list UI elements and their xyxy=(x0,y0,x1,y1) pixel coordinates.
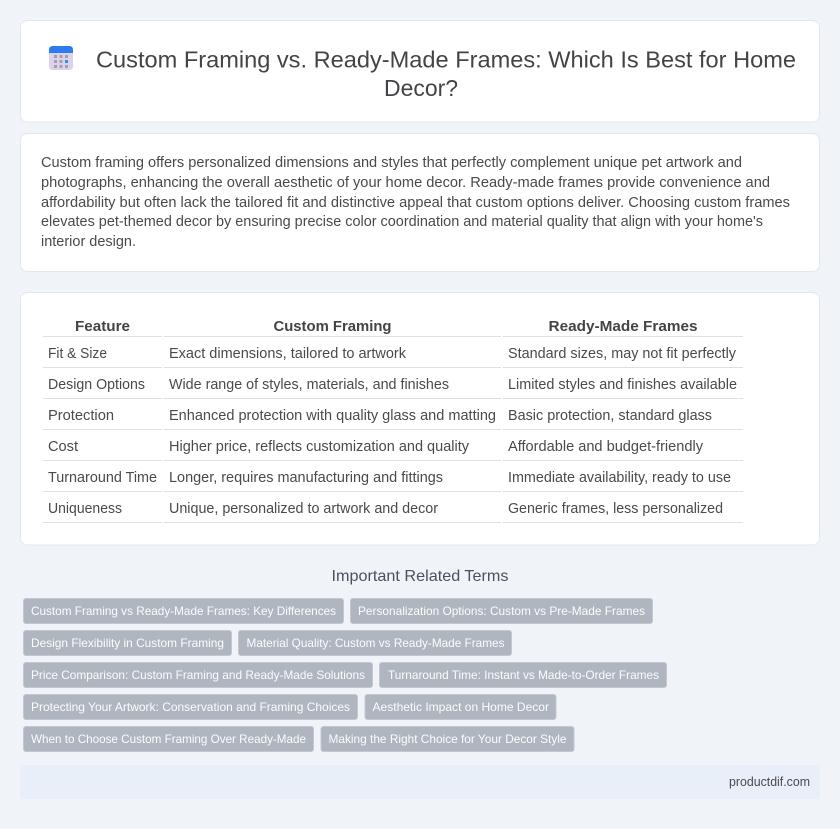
tag xyxy=(24,598,344,624)
row: protection: Basic protection, standard glass xyxy=(508,408,712,424)
tag: Turnaround Time: Instant vs Made-to-Order Frames xyxy=(388,668,659,682)
tag: Price Comparison: Custom Framing and Ready-Made Solutions xyxy=(31,668,365,682)
row: design options: Design Options xyxy=(48,377,145,393)
tag: Personalization Options: Custom vs Pre-Made Frames xyxy=(358,604,645,618)
tag xyxy=(380,662,666,688)
row: uniqueness: Generic frames, less personalized xyxy=(508,501,723,517)
tag: Material Quality: Custom vs Ready-Made Frames xyxy=(246,636,504,650)
tag xyxy=(365,694,556,720)
intro text: photographs, enhancing the overall aesthetic of your home decor. Ready-made frames provide convenience and xyxy=(41,175,770,191)
row: turnaround time: Immediate availability, ready to use xyxy=(508,470,731,486)
tag xyxy=(321,726,574,752)
comparison table panel xyxy=(20,292,820,545)
row: fit and size: Fit & Size xyxy=(48,346,107,362)
row: cost: Affordable and budget-friendly xyxy=(508,439,704,455)
row: uniqueness: Uniqueness xyxy=(48,501,122,517)
tag xyxy=(24,726,314,752)
related terms heading: Important Related Terms xyxy=(332,568,508,585)
table header: Feature xyxy=(75,318,130,335)
row: uniqueness: Unique, personalized to artwork and decor xyxy=(169,501,438,517)
intro text: affordability but often lack the tailored fit and distinctive appeal that custom options deliver. Choosing custom frames xyxy=(41,195,790,211)
tag xyxy=(238,630,512,656)
intro text xyxy=(41,155,790,250)
row: fit and size xyxy=(43,346,743,368)
row: uniqueness xyxy=(43,501,743,523)
row: design options: Wide range of styles, materials, and finishes xyxy=(169,377,449,393)
tag xyxy=(350,598,652,624)
intro text: Custom framing offers personalized dimensions and styles that perfectly complement unique pet artwork and xyxy=(41,155,742,171)
tag xyxy=(24,662,372,688)
icon: calendar xyxy=(49,46,73,70)
row: protection xyxy=(43,408,743,430)
intro panel xyxy=(20,134,820,272)
tag: When to Choose Custom Framing Over Ready-Made xyxy=(31,732,306,746)
row: cost: Cost xyxy=(48,439,78,455)
table header: Custom Framing xyxy=(274,318,392,335)
tag: Making the Right Choice for Your Decor Style xyxy=(328,732,567,746)
footer xyxy=(20,765,820,799)
tag: Protecting Your Artwork: Conservation and Framing Choices xyxy=(31,700,350,714)
intro text: elevates pet-themed decor by ensuring precise color coordination and material quality that align with your home's xyxy=(41,214,763,230)
row: fit and size: Exact dimensions, tailored to artwork xyxy=(169,346,407,362)
title: Decor? xyxy=(384,75,458,101)
row: turnaround time: Longer, requires manufacturing and fittings xyxy=(169,470,443,486)
tag xyxy=(24,630,232,656)
tag: Design Flexibility in Custom Framing xyxy=(31,636,224,650)
row: turnaround time: Turnaround Time xyxy=(48,470,157,486)
row: protection: Protection xyxy=(48,408,114,424)
intro text: interior design. xyxy=(41,234,136,250)
row: protection: Enhanced protection with quality glass and matting xyxy=(169,408,496,424)
row: turnaround time xyxy=(43,470,743,492)
row: design options xyxy=(43,377,743,399)
row: fit and size: Standard sizes, may not fit perfectly xyxy=(508,346,737,362)
tag xyxy=(24,694,358,720)
related terms tags xyxy=(24,598,666,752)
row: design options: Limited styles and finishes available xyxy=(508,377,737,393)
footer: productdif.com xyxy=(729,775,810,789)
title: Custom Framing vs. Ready-Made Frames: Which Is Best for Home xyxy=(96,46,796,72)
header panel xyxy=(20,20,820,122)
row: cost: Higher price, reflects customization and quality xyxy=(169,439,470,455)
table header: Ready-Made Frames xyxy=(548,318,698,335)
tag: Aesthetic Impact on Home Decor xyxy=(372,700,549,714)
tag: Custom Framing vs Ready-Made Frames: Key Differences xyxy=(31,604,336,618)
row: cost xyxy=(43,439,743,461)
table header xyxy=(43,318,743,337)
